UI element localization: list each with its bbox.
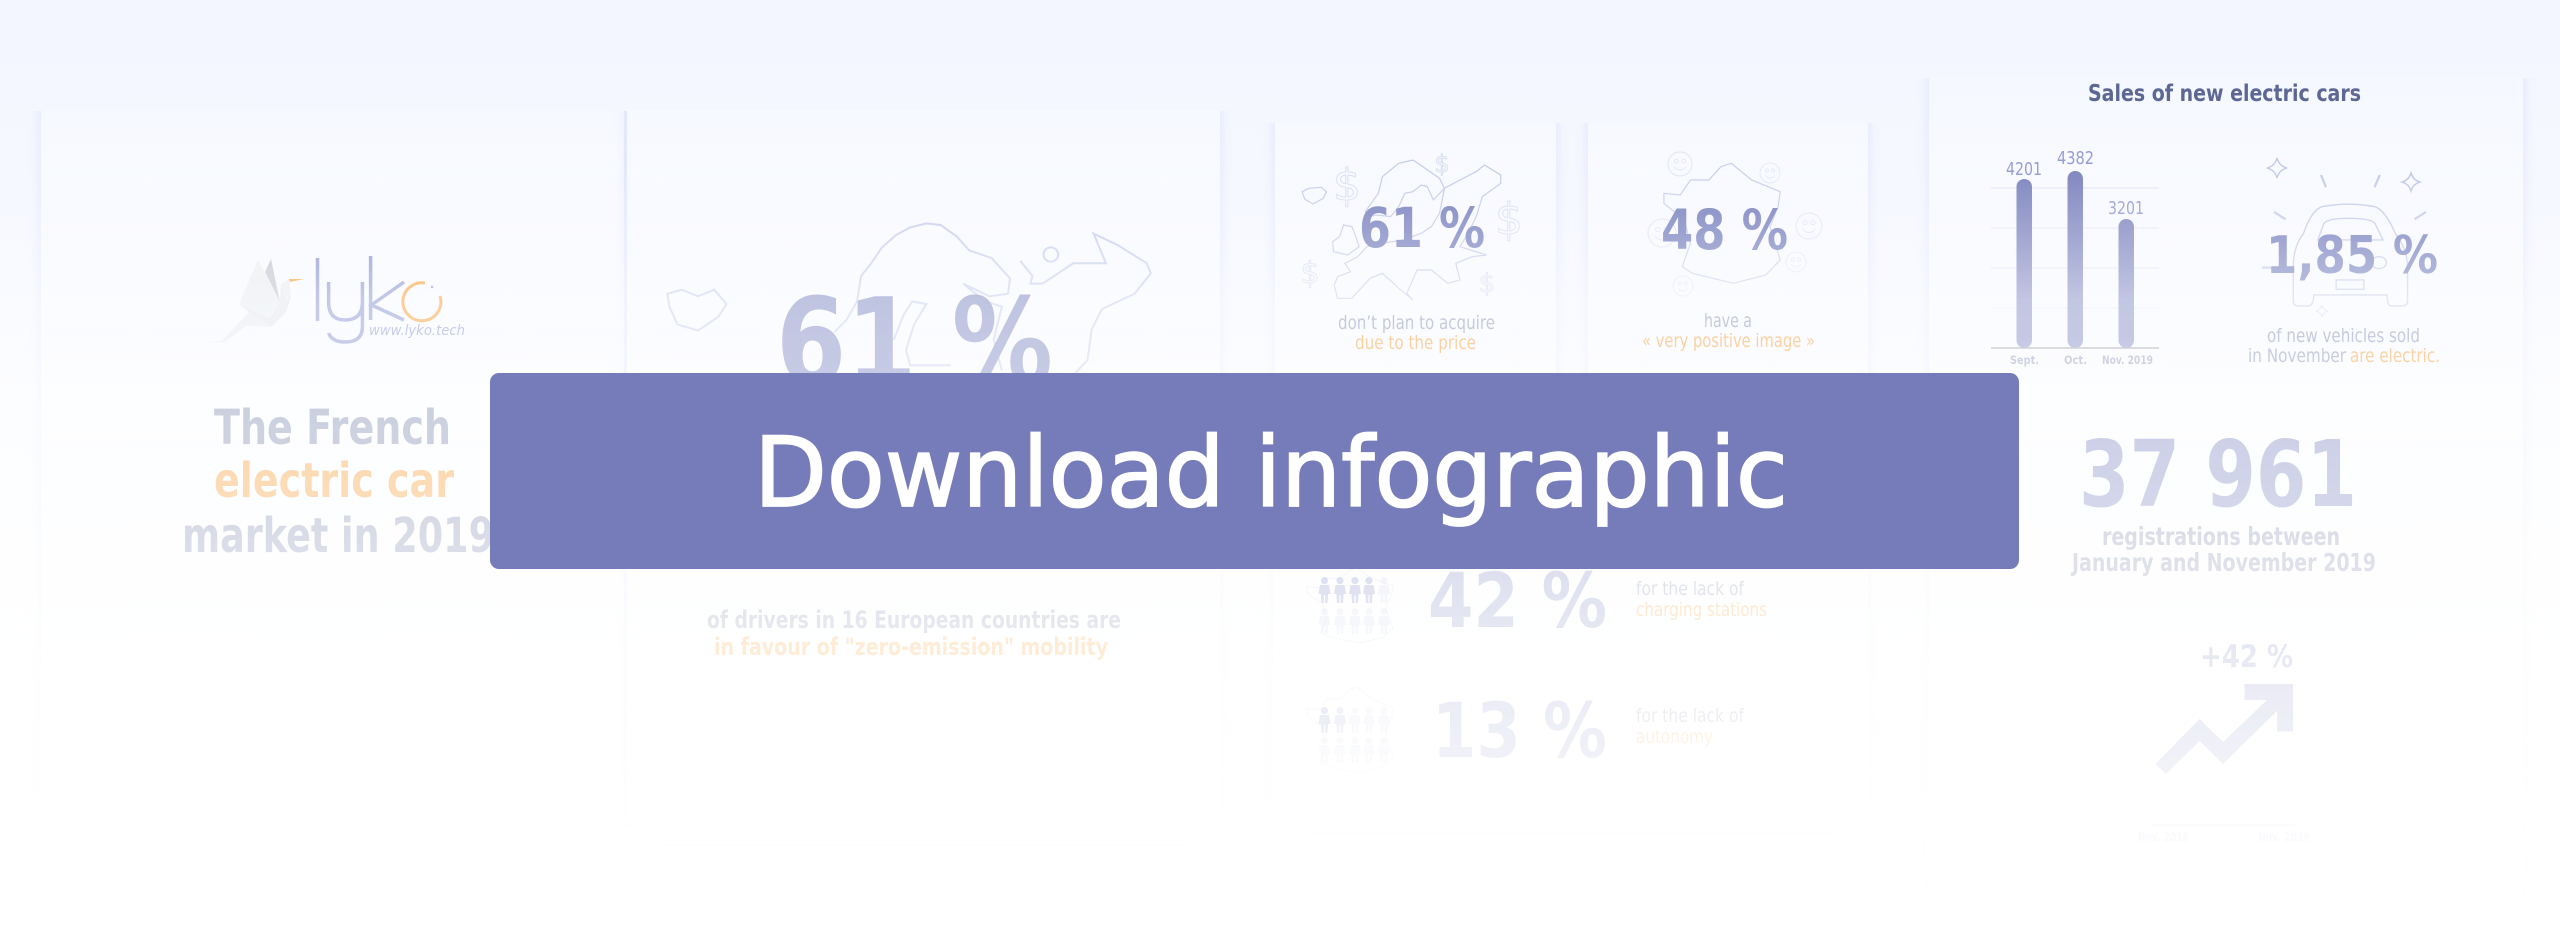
button: download infographic: [490, 373, 2019, 569]
text: don't plan to acquire due to the price: don’t plan to acquire: [1338, 312, 1495, 334]
text: for the lack of autonomy: [1636, 708, 1744, 747]
text: for the lack of charging stations: [1636, 578, 1767, 621]
icon: Europe map with dollar signs: $: [1495, 194, 1523, 245]
trend axis with labels: Nov. 2018: [2138, 830, 2189, 844]
icon: origami crane logo: [214, 260, 304, 342]
bar value labels: [2006, 151, 2143, 214]
icon: Europe map with dollar signs: $: [1333, 160, 1361, 211]
panel: other barriers: [1306, 569, 1766, 758]
text: for the lack of charging stations: for the lack of: [1636, 578, 1745, 600]
faded infographic content: [38, 78, 2526, 774]
text: of new vehicles sold in November are electric: in November: [2248, 345, 2346, 367]
text: of new vehicles sold in November are electric: of new vehicles sold: [2267, 325, 2420, 347]
trend axis with labels: [2138, 825, 2310, 844]
figure +42 %: +42 %: [2200, 639, 2293, 675]
bar: Oct. 4382: [2068, 171, 2083, 348]
bar: Nov. 2019 3201: [2118, 219, 2134, 348]
text: have a very positive image: « very positive image »: [1642, 330, 1815, 352]
map: Europe outline: [667, 223, 1151, 373]
heading: The French electric car market in 2019: The French: [214, 400, 451, 456]
bar category labels: Oct.: [2064, 353, 2087, 367]
text: registrations between January and November 2019: January and November 2019: [2070, 548, 2376, 577]
text: have a very positive image: [1643, 313, 1814, 351]
figure 13 %: 13 %: [1432, 686, 1607, 775]
bar value labels: 4201: [2006, 159, 2042, 180]
bar chart: monthly sales: [1991, 148, 2159, 367]
heading: The French electric car market in 2019: [185, 408, 490, 552]
panel: European drivers: [625, 111, 1222, 660]
icon: Europe map with dollar signs: $: [1479, 269, 1495, 299]
bar value labels: 4382: [2057, 148, 2094, 169]
heading: The French electric car market in 2019: electric car: [214, 453, 454, 509]
panel: positive image: [1586, 123, 1870, 351]
text: registrations between January and November 2019: [2070, 522, 2376, 577]
arrow: upward trend: [2156, 684, 2293, 774]
text: drivers in favour of zero-emission mobility: in favour of "zero-emission" mobility: [714, 633, 1108, 661]
text: have a very positive image: have a: [1704, 310, 1752, 332]
figure 37 961: 37 961: [2079, 421, 2357, 528]
icon: Europe map with dollar signs: [1300, 150, 1523, 300]
text: don't plan to acquire due to the price: due to the price: [1355, 332, 1476, 354]
figure 61 %: 61 %: [1359, 196, 1485, 260]
heading: The French electric car market in 2019: market in 2019: [182, 508, 494, 564]
text: drivers in favour of zero-emission mobility: [707, 606, 1121, 661]
icon: electric car with sparkles: [2262, 158, 2426, 317]
icon: people pictogram 13 %: [1318, 707, 1390, 733]
text: drivers in favour of zero-emission mobility: of drivers in 16 European countries are: [707, 606, 1121, 634]
icon: Europe map with dollar signs: $: [1434, 150, 1450, 178]
figure 1,85 %: 1,85 %: [2266, 226, 2438, 286]
icon: Europe map with dollar signs: $: [1300, 256, 1320, 291]
icon: France map with smileys: [1648, 152, 1822, 296]
trend axis with labels: Nov. 2019: [2258, 830, 2310, 844]
panel: price barrier: [1272, 123, 1558, 353]
bar category labels: Sept.: [2010, 353, 2039, 367]
heading: sales of new electric cars: Sales of new electric cars: [2088, 81, 2361, 107]
logo wordmark lyko: www.lyko.tech: [369, 323, 465, 339]
logo wordmark lyko: [318, 256, 465, 342]
bar: Sept. 4201: [2016, 179, 2032, 348]
text: for the lack of autonomy: autonomy: [1636, 726, 1713, 748]
big figure 61 %: 61 %: [776, 274, 1053, 413]
panel: sales of new electric cars: [1926, 78, 2526, 774]
icon: people pictogram 42 %: [1306, 569, 1394, 634]
text: for the lack of autonomy: for the lack of: [1636, 705, 1745, 727]
button: download infographic: Download infographic: [754, 417, 1788, 529]
text: of new vehicles sold in November are electric: [2250, 328, 2438, 362]
text: registrations between January and November 2019: registrations between: [2102, 522, 2340, 551]
figure 48 %: 48 %: [1661, 198, 1788, 262]
bar value labels: 3201: [2108, 198, 2144, 219]
bar category labels: [2010, 356, 2152, 366]
text: don't plan to acquire due to the price: [1338, 315, 1494, 353]
figure 42 %: 42 %: [1428, 556, 1607, 645]
bar category labels: Nov. 2019: [2102, 353, 2153, 367]
text: of new vehicles sold in November are electric: are electric.: [2350, 345, 2440, 367]
panel: intro title card: [38, 111, 626, 552]
text: for the lack of charging stations: charging stations: [1636, 599, 1767, 621]
